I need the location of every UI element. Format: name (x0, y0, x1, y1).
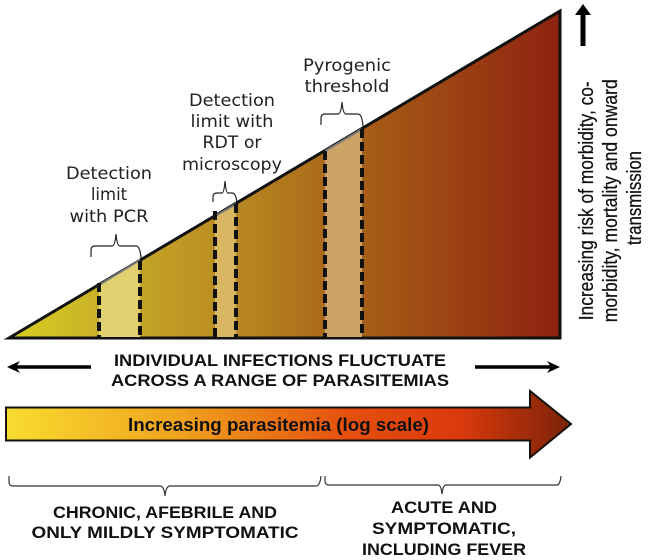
arrow: increasing parasitemia (6, 391, 571, 458)
arrow: right fluctuation (475, 361, 560, 373)
arrow: up (575, 4, 591, 46)
label: detection limit with RDT or microscopy: microscopy (182, 155, 282, 174)
label: pyrogenic threshold: threshold (304, 77, 390, 96)
label: detection limit with PCR: limit (91, 185, 128, 204)
label: detection limit with RDT or microscopy: limit with (190, 112, 274, 131)
bracket: pyrogenic (321, 102, 363, 126)
band: detection limit with RDT or microscopy (215, 204, 236, 338)
main triangle (9, 11, 560, 338)
bracket: PCR (91, 234, 141, 258)
bracket: chronic (9, 476, 321, 496)
text: acute and symptomatic: INCLUDING FEVER (362, 540, 526, 559)
text: increasing risk axis label: morbidity, mortality and onward (600, 79, 622, 322)
text: acute and symptomatic: SYMPTOMATIC, (372, 519, 516, 538)
band: detection limit with PCR (99, 260, 140, 338)
arrow: left fluctuation (7, 361, 91, 373)
text: chronic, afebrile: CHRONIC, AFEBRILE AND (53, 503, 277, 522)
text: increasing risk axis label: transmission (624, 151, 646, 245)
text: increasing parasitemia: Increasing parasitemia (log scale) (128, 415, 429, 435)
label: detection limit with RDT or microscopy: RDT or (202, 133, 262, 152)
text: increasing risk axis label (576, 74, 646, 322)
text: chronic, afebrile: ONLY MILDLY SYMPTOMATIC (32, 523, 298, 542)
text: acute and symptomatic: ACUTE AND (391, 498, 497, 517)
bracket: RDT (213, 181, 237, 203)
label: detection limit with PCR: with PCR (70, 207, 148, 226)
label: detection limit with PCR: Detection (66, 164, 152, 183)
label: detection limit with RDT or microscopy: Detection (189, 91, 275, 110)
text: increasing risk axis label: Increasing risk of morbidity, co- (576, 81, 598, 320)
bracket: acute (325, 476, 561, 494)
text: individual infections fluctuate: INDIVIDUAL INFECTIONS FLUCTUATE (114, 351, 446, 370)
text: individual infections fluctuate: ACROSS A RANGE OF PARASITEMIAS (111, 371, 449, 390)
label: pyrogenic threshold: Pyrogenic (303, 56, 391, 75)
band: pyrogenic threshold (325, 129, 362, 338)
